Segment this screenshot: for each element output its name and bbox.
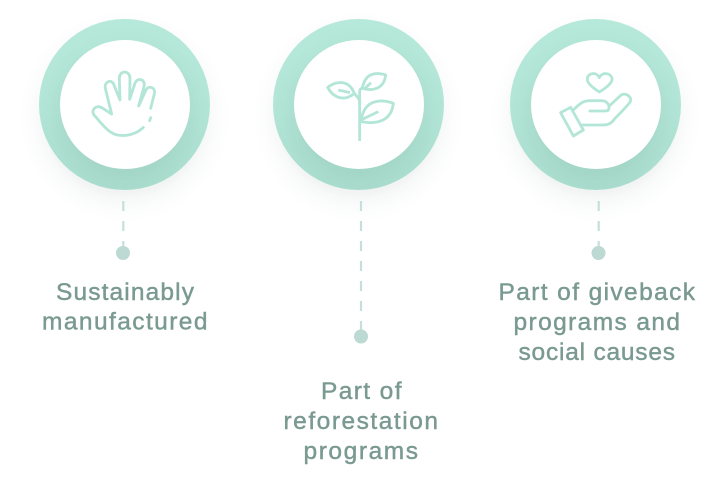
label: sustainably manufactured: Sustainably xyxy=(56,279,195,306)
icon: hand holding heart xyxy=(561,74,631,136)
icon: plant sprout xyxy=(328,74,393,141)
label: part of giveback programs and social causes xyxy=(498,279,696,366)
circle ring: giving hand xyxy=(510,19,681,190)
label: part of reforestation programs: Part of xyxy=(321,378,402,405)
connector: column 1 xyxy=(116,201,130,260)
label: part of reforestation programs: reforestation xyxy=(284,408,438,435)
icon: open hand xyxy=(93,72,155,135)
circle ring: hand xyxy=(39,19,210,190)
connector: column 3 xyxy=(592,201,606,260)
label: part of giveback programs and social causes: programs and xyxy=(514,309,680,336)
label: part of reforestation programs: programs xyxy=(304,438,418,465)
connector: column 2 xyxy=(354,201,368,344)
label: part of reforestation programs xyxy=(284,378,438,465)
label: sustainably manufactured xyxy=(42,279,208,336)
label: part of giveback programs and social causes: social causes xyxy=(518,339,675,366)
label: sustainably manufactured: manufactured xyxy=(42,308,208,336)
circle ring: plant xyxy=(273,19,444,190)
label: part of giveback programs and social causes: Part of giveback xyxy=(498,279,696,306)
